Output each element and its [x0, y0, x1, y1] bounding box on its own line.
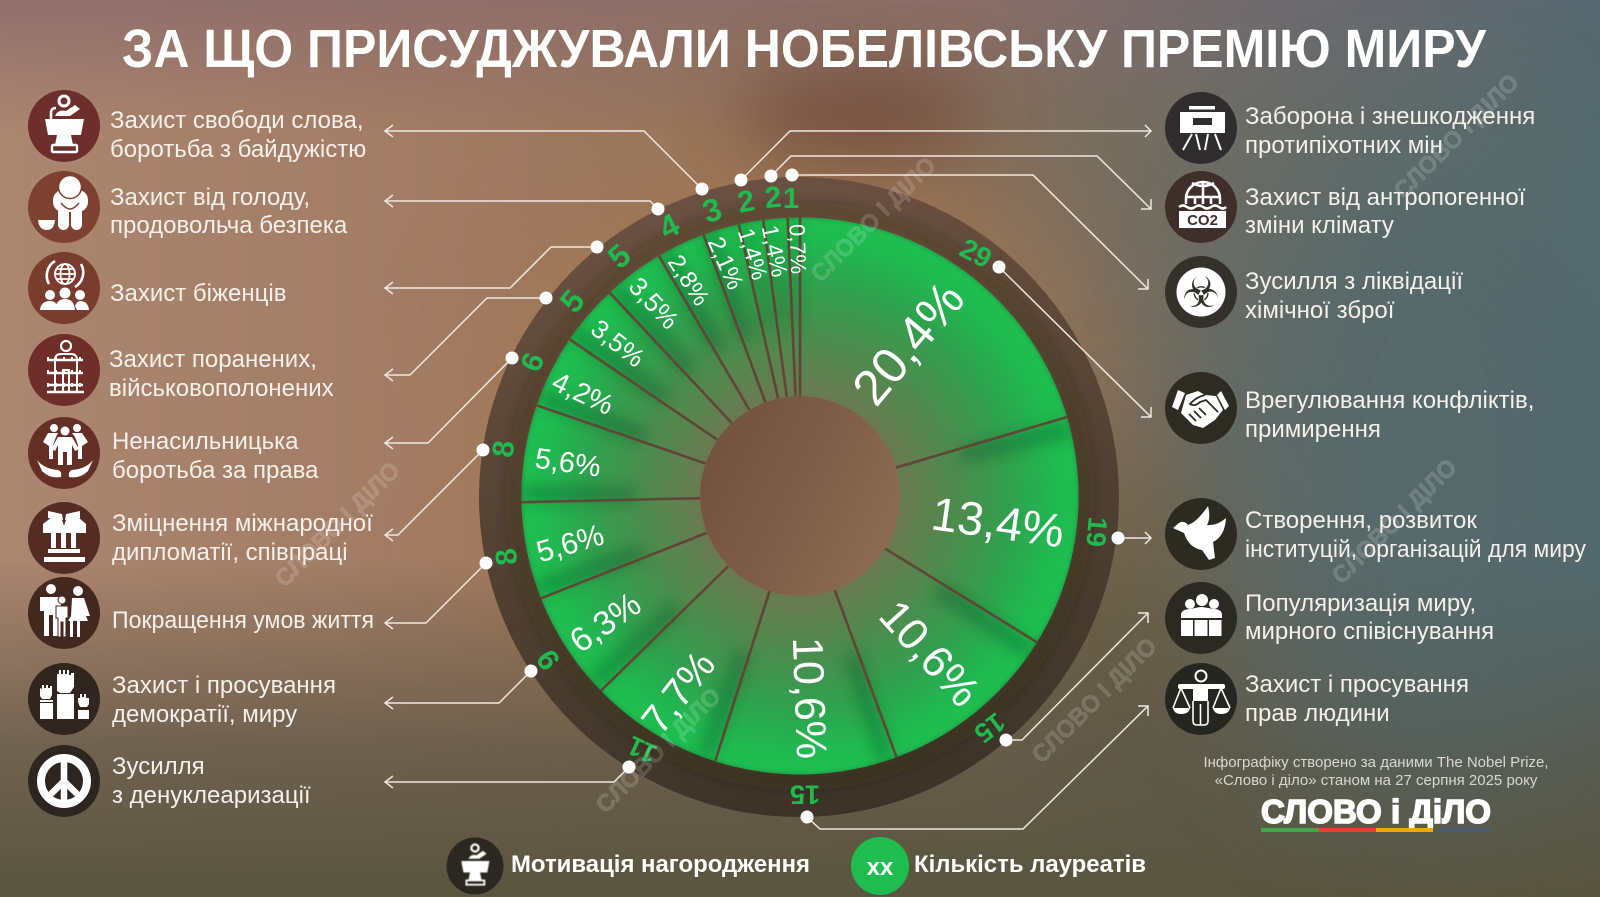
arrow: row 2: [385, 195, 658, 209]
count 6: 6: [515, 348, 551, 376]
source note: Інфографіку створено за даними The Nobel Prize,: [1203, 754, 1549, 771]
arrow: row 4: [385, 298, 546, 381]
arrow: conflicts: [999, 267, 1151, 417]
icon: justice scales: [1165, 663, 1237, 735]
arrow: chemical weapons: [792, 175, 1148, 289]
icon: biohazard: [1165, 256, 1237, 328]
chart: pie slices: [522, 218, 1079, 774]
arrow: human rights: [807, 706, 1148, 829]
text: diplomacy: дипломатії, співпраці: [112, 539, 348, 566]
icon: peace sign: [28, 745, 100, 817]
text: freedom of speech: боротьба з байдужістю: [110, 136, 366, 163]
slice 6,3%: [541, 533, 728, 691]
text: living conditions: Покращення умов життя: [112, 607, 374, 634]
5,6% lower: 5,6%: [533, 519, 608, 569]
legend: [446, 837, 1146, 895]
slice 3,5% upper: [610, 256, 749, 423]
count 1: 1: [783, 183, 799, 215]
count 3: 3: [698, 190, 726, 230]
text: chemical weapons: хімічної зброї: [1245, 297, 1395, 324]
arrow: mines: [741, 125, 1151, 180]
icon: hunger: [28, 171, 100, 243]
icon: embracing people: [1165, 582, 1237, 654]
icon: dove: [1165, 498, 1237, 570]
slice 4,2%: [537, 339, 717, 463]
chart: centre hole: [700, 396, 900, 596]
slice 1,4% second: [763, 218, 796, 397]
text: human rights: Захист і просування: [1245, 671, 1469, 698]
slice 3,5% lower: [570, 293, 732, 440]
panel: right categories: [1165, 92, 1586, 735]
count 5 lower: 5: [553, 283, 592, 320]
slice 0,7%: [788, 218, 800, 396]
icon: refugees: [28, 252, 100, 324]
icon: nonviolence: [28, 417, 100, 489]
text: conflicts: Врегулювання конфліктів,: [1245, 387, 1534, 414]
text: democracy: демократії, миру: [112, 701, 297, 728]
title: ЗА ЩО ПРИСУДЖУВАЛИ НОБЕЛІВСЬКУ ПРЕМІЮ МИРУ: [122, 19, 1487, 79]
3,5% upper: 3,5%: [623, 271, 685, 335]
slice 13,4%: [885, 417, 1079, 642]
1,4% first: 1,4%: [733, 225, 773, 283]
slice 10,6% right: [835, 548, 1037, 757]
text: prisoners: військовополонених: [109, 375, 334, 402]
count 5 upper: 5: [601, 237, 638, 276]
panel: left categories: [28, 90, 374, 817]
logo: СЛОВО і ДіЛО: [1261, 793, 1491, 830]
10,6% bottom: 10,6%: [783, 636, 835, 760]
text: denuclearisation: з денуклеаризації: [112, 782, 311, 809]
text: institutions: Створення, розвиток: [1245, 507, 1477, 534]
count 8 lower: 8: [489, 546, 524, 567]
text: human rights: прав людини: [1245, 700, 1390, 727]
watermarks: СЛОВО І ДІЛО: [1327, 454, 1463, 590]
count 15 right: 15: [969, 707, 1011, 749]
connectors left: [385, 125, 702, 788]
text: mines: протипіхотних мін: [1245, 132, 1443, 159]
arrow: row 5: [385, 358, 512, 449]
icon: lectern: [28, 90, 100, 162]
count 11: 11: [623, 730, 661, 769]
legend label: motivation: Мотивація нагородження: [511, 851, 810, 878]
arrow: popularisation: [1006, 613, 1148, 740]
watermarks: СЛОВО І ДІЛО: [591, 683, 727, 819]
count 9: 9: [531, 643, 567, 676]
count 15 bottom: 15: [790, 780, 820, 810]
watermarks: СЛОВО І ДІЛО: [1027, 633, 1163, 769]
arrow: climate: [771, 156, 1151, 209]
slice 2,1%: [704, 224, 778, 402]
laureate counts: [487, 181, 1113, 810]
7,7%: 7,7%: [633, 643, 724, 742]
text: conflicts: примирення: [1245, 416, 1381, 443]
legend icon: motivation: [446, 838, 504, 894]
text: nonviolent struggle: боротьба за права: [112, 457, 319, 484]
slice 5,6% upper: [522, 405, 706, 502]
count 2 second: 2: [763, 181, 783, 215]
icon: prisoners: [28, 334, 100, 406]
connectors right: [741, 125, 1151, 829]
4,2%: 4,2%: [547, 366, 618, 421]
slice separators: [520, 216, 1068, 763]
arrow: row 3: [385, 247, 597, 294]
slice 5,6% lower: [522, 498, 707, 598]
3,5% lower: 3,5%: [585, 313, 651, 373]
13,4%: 13,4%: [928, 486, 1068, 557]
0,7%: 0,7%: [784, 224, 811, 275]
text: nonviolent struggle: Ненасильницька: [112, 428, 299, 455]
text: mines: Заборона і знешкодження: [1245, 103, 1535, 130]
icon: handshake: [1165, 372, 1237, 444]
count 29: 29: [955, 232, 997, 274]
icon: climate CO2: CO2: [1187, 212, 1218, 229]
text: prisoners: Захист поранених,: [109, 346, 317, 373]
text: diplomacy: Зміцнення міжнародної: [112, 510, 373, 537]
watermarks: СЛОВО І ДІЛО: [806, 152, 942, 288]
icon: landmine: [1165, 92, 1237, 164]
text: popularising peace: мирного співіснування: [1245, 618, 1494, 645]
watermarks: СЛОВО І ДІЛО: [1389, 69, 1525, 205]
slice edge shading: [522, 218, 1070, 760]
text: refugees: Захист біженців: [110, 280, 286, 307]
icon: diplomacy: [28, 502, 100, 574]
2,8%: 2,8%: [662, 250, 714, 311]
percentage labels: [533, 223, 1068, 760]
text: hunger: Захист від голоду,: [110, 184, 310, 211]
count 19: 19: [1080, 516, 1113, 548]
watermarks: СЛОВО І ДІЛО: [270, 457, 406, 593]
chart: outer ring: [479, 177, 1119, 817]
text: institutions: інституцій, організацій для миру: [1245, 536, 1586, 563]
arrow: institutions: [1118, 532, 1151, 544]
watermarks: [270, 69, 1525, 819]
icon: raised hands: [28, 663, 100, 735]
text: freedom of speech: Захист свободи слова,: [110, 107, 364, 134]
text: climate: зміни клімату: [1245, 212, 1394, 239]
count 4: 4: [653, 206, 685, 246]
slice 7,7%: [601, 566, 770, 761]
6,3%: 6,3%: [563, 585, 648, 661]
connector dots: [476, 168, 1124, 824]
legend label: count: Кількість лауреатів: [914, 851, 1146, 878]
text: climate: Захист від антропогенної: [1245, 184, 1526, 211]
arrow: row 7: [385, 563, 486, 629]
slice 20,4%: [800, 218, 1067, 468]
slice 10,6% bottom: [715, 590, 896, 774]
5,6% upper: 5,6%: [533, 443, 603, 484]
arrow: row 8: [385, 671, 531, 709]
1,4% second: 1,4%: [757, 223, 793, 279]
count 8 upper: 8: [487, 439, 521, 459]
source note: «Слово і діло» станом на 27 серпня 2025 року: [1215, 772, 1538, 789]
legend icon: count: [851, 837, 909, 895]
text: hunger: продовольча безпека: [110, 212, 348, 239]
text: democracy: Захист і просування: [112, 672, 336, 699]
arrow: row 1: [385, 125, 702, 189]
text: popularising peace: Популяризація миру,: [1245, 590, 1476, 617]
20,4%: 20,4%: [841, 271, 975, 416]
count 2 first: 2: [735, 184, 757, 220]
arrow: row 9: [385, 767, 629, 788]
2,1%: 2,1%: [702, 233, 749, 294]
slice 1,4% first: [739, 220, 787, 398]
10,6% right: 10,6%: [869, 591, 989, 716]
slice 2,8%: [659, 235, 765, 410]
icon: biohazard: ☣: [1182, 268, 1220, 317]
icon: family: [28, 577, 100, 649]
arrow: row 6: [385, 450, 483, 541]
legend icon: count: xx: [867, 854, 894, 881]
icon: climate CO2: [1165, 171, 1237, 243]
text: chemical weapons: Зусилля з ліквідації: [1245, 268, 1463, 295]
text: denuclearisation: Зусилля: [112, 753, 205, 780]
